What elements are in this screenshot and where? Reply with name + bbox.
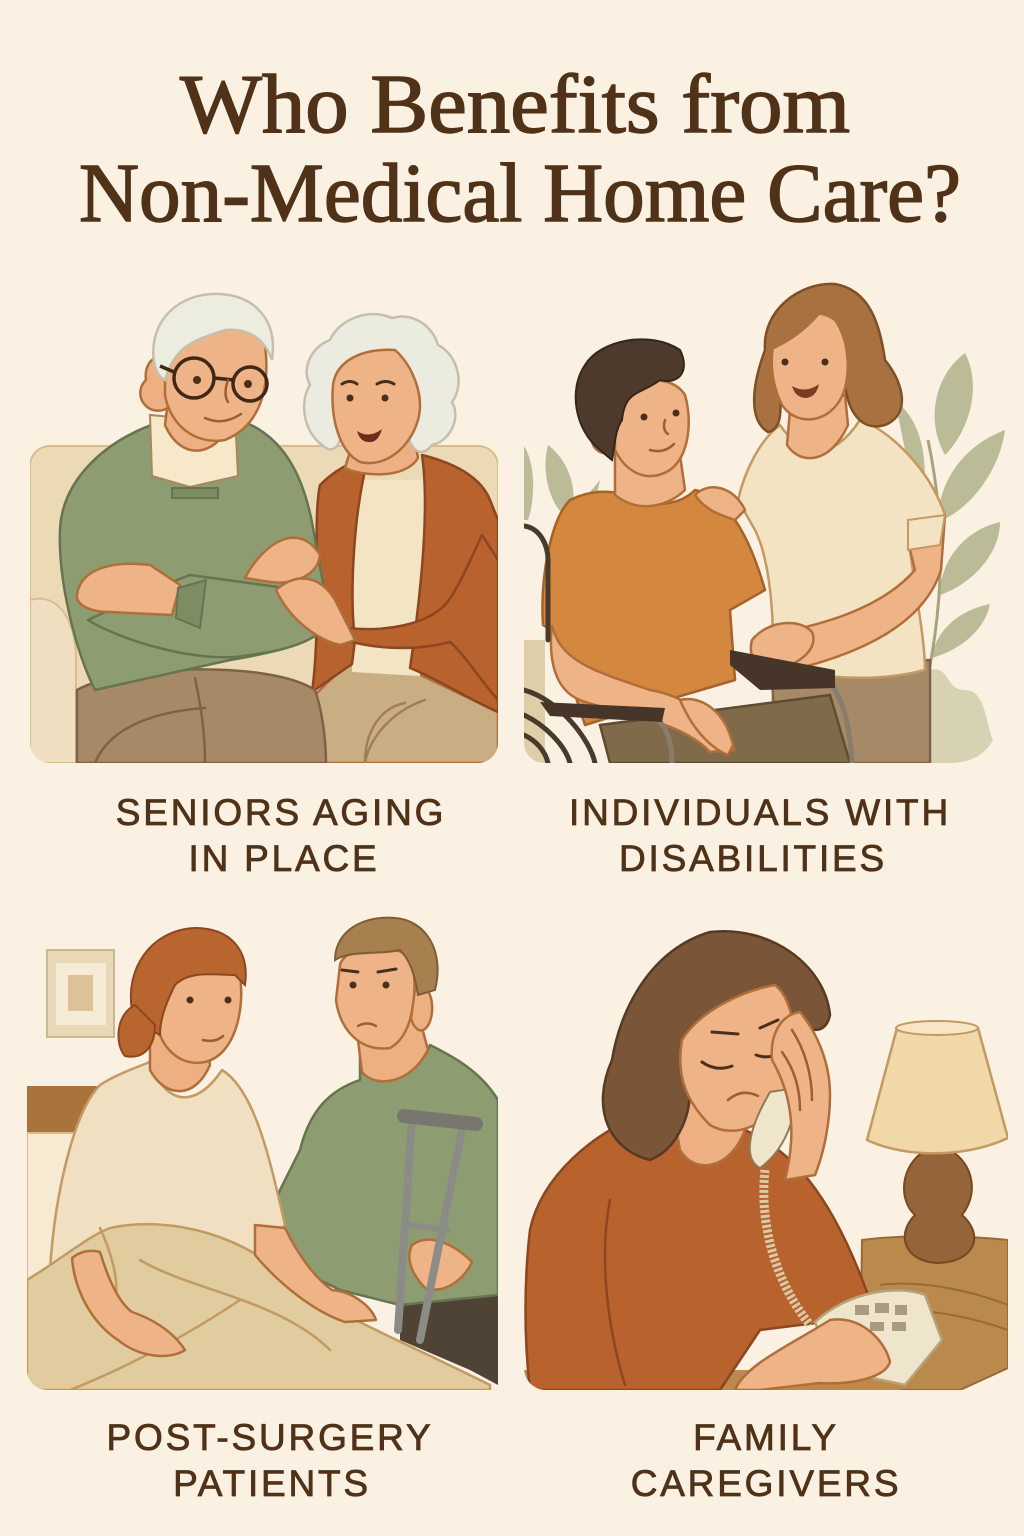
wall bottom	[524, 640, 545, 763]
hair	[754, 284, 902, 432]
arms and hands	[72, 1251, 185, 1356]
woman	[526, 931, 942, 1390]
panel: family caregivers	[524, 931, 1008, 1390]
title: Who Benefits from	[180, 58, 850, 151]
panel: post-surgery patients	[27, 918, 498, 1390]
panel 4 caption	[631, 1417, 901, 1504]
elderly woman	[304, 314, 498, 763]
sofa	[30, 446, 498, 763]
hand on face	[772, 1012, 830, 1180]
panel 1 caption	[116, 792, 446, 879]
forearm and hand	[735, 1319, 890, 1390]
cardigan sleeve	[348, 535, 498, 700]
man with crutches	[278, 916, 498, 1385]
title: Non-Medical Home Care?	[79, 147, 961, 240]
woman sitting	[50, 928, 285, 1300]
phone cord	[764, 1170, 810, 1325]
base phone	[815, 1290, 942, 1385]
title	[79, 58, 961, 240]
panel: individuals with disabilities	[524, 284, 1005, 763]
blanket	[27, 1224, 490, 1390]
panel: seniors aging in place	[30, 294, 498, 763]
panel 2 caption	[569, 792, 951, 879]
sofa arm	[30, 599, 76, 763]
woman hair	[304, 314, 459, 452]
hair	[603, 931, 830, 1160]
crossed arms	[88, 575, 330, 657]
table	[860, 1236, 1008, 1390]
clasped hands	[276, 579, 355, 645]
panel 3 caption	[107, 1417, 433, 1504]
panel 3 caption: PATIENTS	[173, 1463, 371, 1504]
panel 4 caption: FAMILY	[693, 1417, 839, 1458]
woman standing	[738, 284, 945, 763]
lamp	[867, 1021, 1008, 1263]
man in wheelchair	[542, 339, 850, 763]
hand on shoulder	[695, 487, 745, 520]
head	[140, 358, 170, 411]
plants	[524, 353, 1005, 763]
panel 3 caption: POST-SURGERY	[107, 1417, 433, 1458]
elderly man	[60, 294, 330, 763]
panel 4 caption: CAREGIVERS	[631, 1463, 901, 1504]
panel 2 caption: DISABILITIES	[619, 838, 887, 879]
panel 2 caption: INDIVIDUALS WITH	[569, 792, 951, 833]
wheelchair	[524, 526, 852, 763]
phone handset	[750, 1088, 795, 1168]
glasses	[160, 358, 267, 401]
panel 1 caption: IN PLACE	[188, 838, 380, 879]
wall picture	[47, 950, 114, 1037]
headboard and pillow	[27, 1086, 98, 1132]
panel 1 caption: SENIORS AGING	[116, 792, 446, 833]
crutch	[398, 1116, 476, 1340]
